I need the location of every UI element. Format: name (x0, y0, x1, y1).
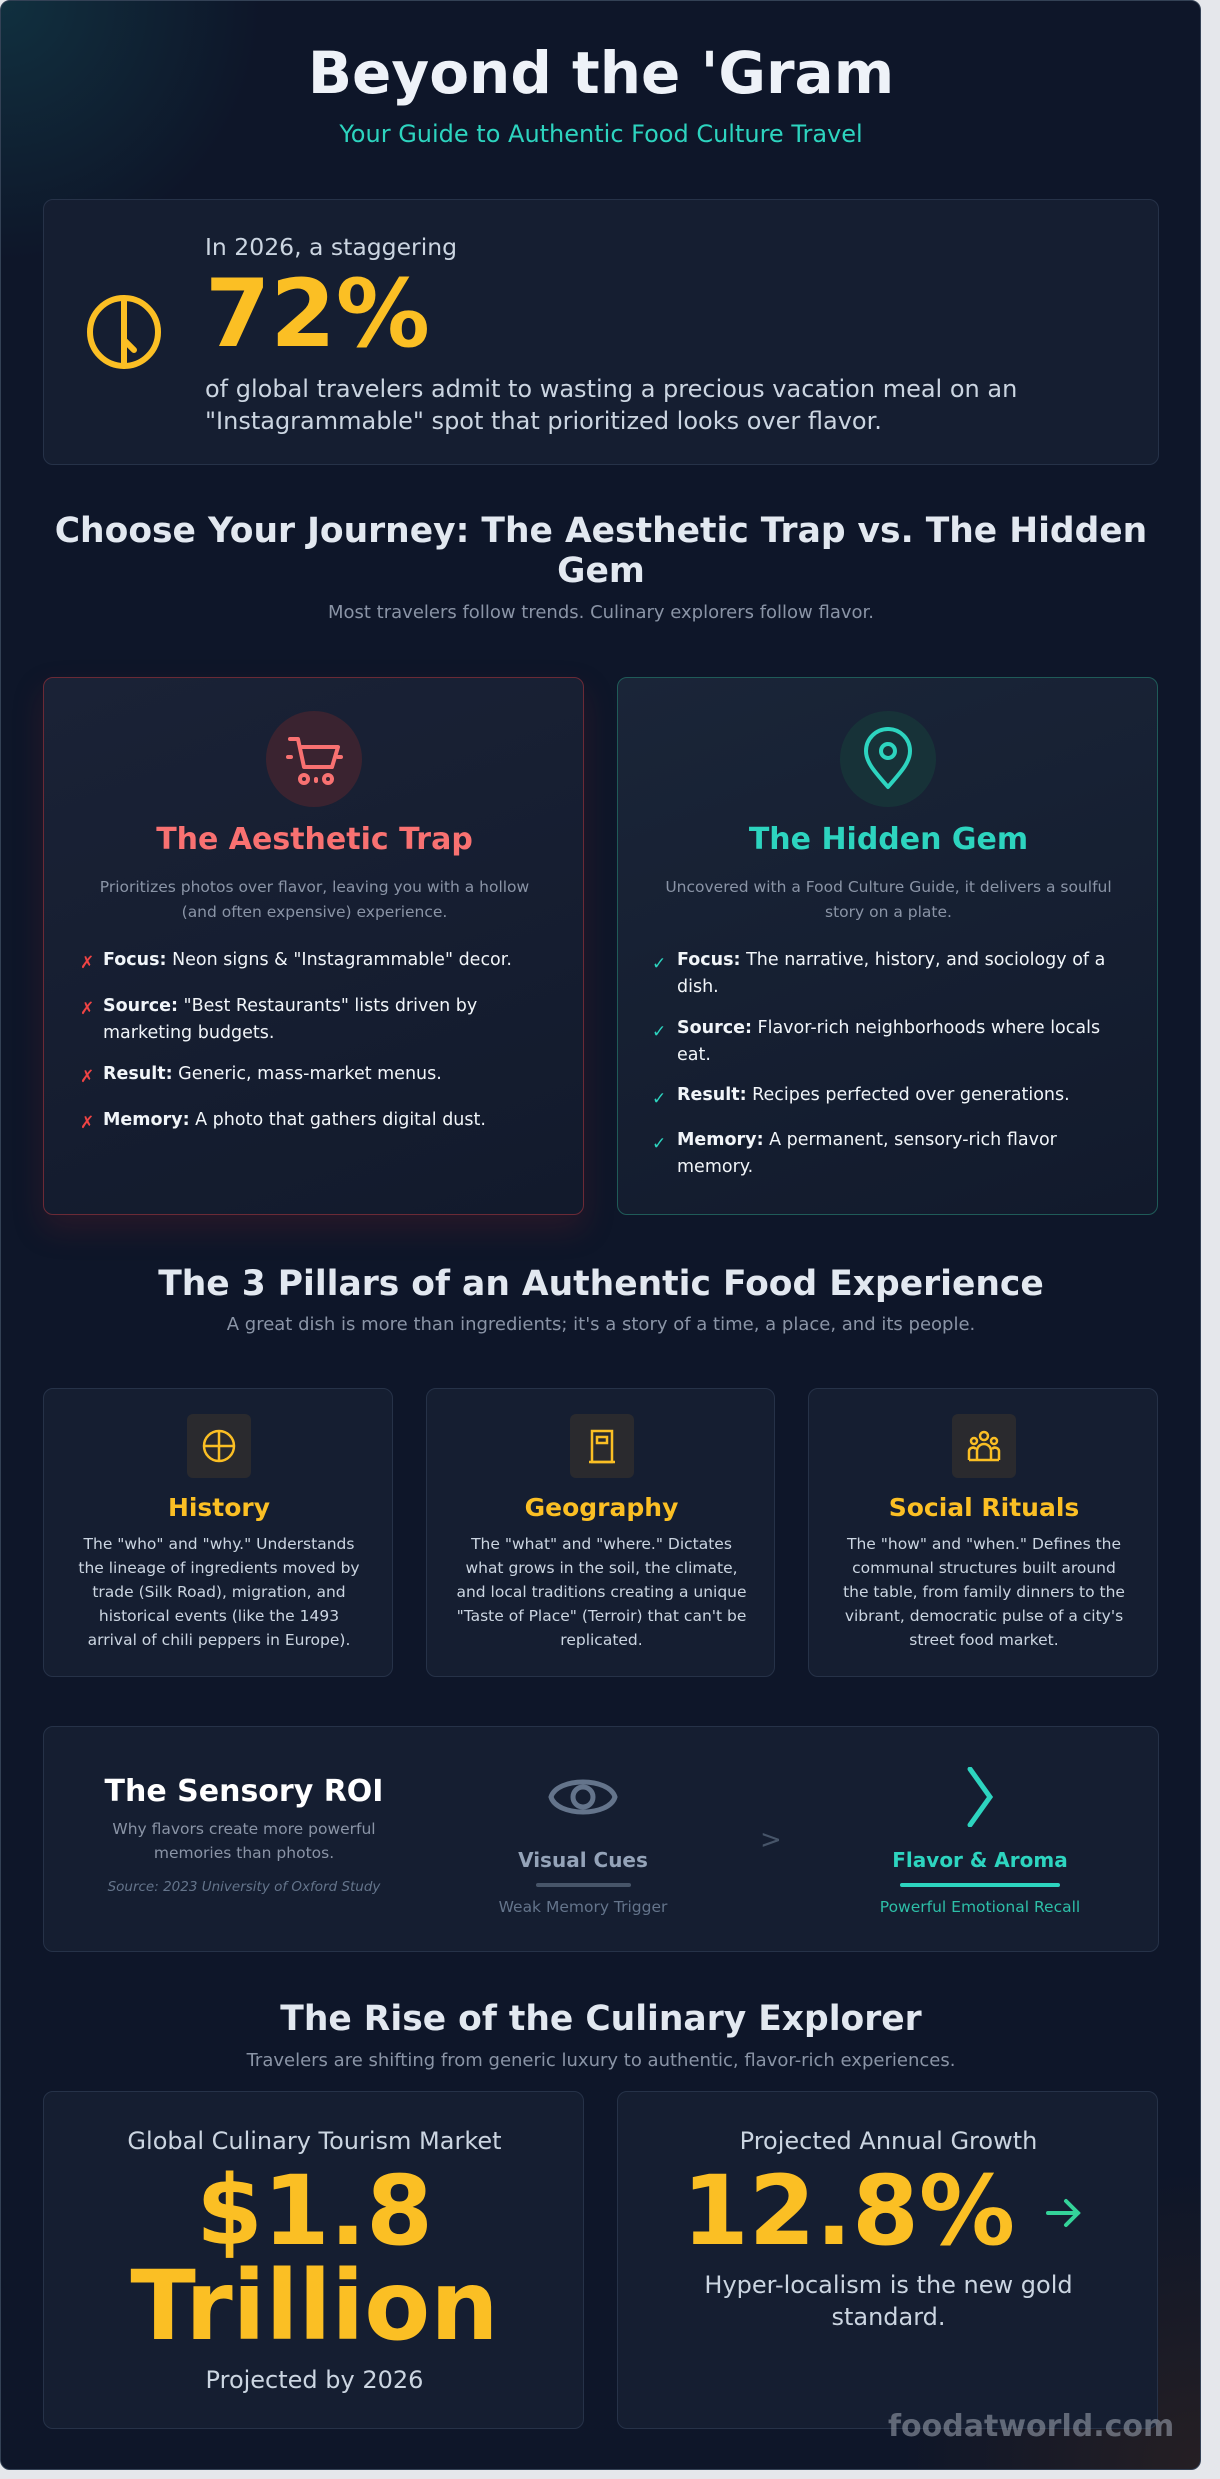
panel: growth (617, 2091, 1158, 2429)
watermark: foodatworld.com (888, 2409, 1174, 2444)
section heading: choose your journey: Choose Your Journey: The Aesthetic Trap vs. The Hidden (55, 511, 1147, 551)
list (652, 950, 1105, 1177)
icon: chevron (968, 1767, 993, 1827)
panel: aesthetic trap: Memory: A photo that gathers digital dust. (103, 1110, 486, 1130)
text: The "who" and "why." Understands the lineage of ingredients moved by trade (Silk Road), migration, and historical events (like the 1493 (78, 1535, 360, 1625)
stat text: In 2026, a staggering (205, 233, 457, 261)
panel: aesthetic trap (43, 677, 584, 1215)
panel: hidden gem: Memory: A permanent, sensory-rich flavor memory. (677, 1130, 1057, 1177)
icon: map pin (840, 711, 936, 807)
text: arrival of chili peppers in Europe). (88, 1631, 350, 1649)
big number: $1.8 (196, 2155, 433, 2267)
stat text (205, 233, 1017, 435)
panel: hidden gem: ✓ (652, 1022, 666, 1042)
big number (130, 2155, 499, 2362)
ROI heading block: memories than photos. (154, 1844, 334, 1862)
description: story on a plate. (825, 903, 952, 921)
section subtitle: A great dish is more than ingredients; it's a story of a time, a place, and its people. (227, 1314, 975, 1335)
panel: market size: Global Culinary Tourism Market (127, 2127, 502, 2155)
stat text: of global travelers admit to wasting a precious vacation meal on an (205, 375, 1017, 403)
description: Uncovered with a Food Culture Guide, it delivers a soulful (665, 878, 1112, 896)
panel: hidden gem: Source: Flavor-rich neighborhoods where locals eat. (677, 1018, 1100, 1065)
panel: market size: Projected by 2026 (206, 2366, 423, 2394)
panel: aesthetic trap: Focus: Neon signs & "Instagrammable" decor. (103, 950, 512, 970)
ROI heading block: Why flavors create more powerful (112, 1820, 376, 1838)
panel: aesthetic trap: Source: "Best Restaurants" lists driven by marketing budgets. (103, 996, 477, 1043)
title: Social Rituals (889, 1493, 1079, 1522)
flavor column: Powerful Emotional Recall (880, 1898, 1080, 1916)
visual cues column: Visual Cues (518, 1848, 648, 1872)
title: Beyond the 'Gram (308, 39, 894, 107)
section heading: choose your journey: Gem (557, 551, 645, 591)
icon: cart (266, 711, 362, 807)
icon: people (952, 1414, 1016, 1478)
title: Geography (525, 1493, 678, 1522)
ROI heading block: Source: 2023 University of Oxford Study (108, 1879, 380, 1895)
description (665, 878, 1112, 921)
panel: hidden gem: Focus: The narrative, history, and sociology of a dish. (677, 950, 1105, 997)
title: The Aesthetic Trap (156, 822, 473, 857)
section heading: choose your journey (55, 511, 1147, 591)
flavor column (880, 1767, 1080, 1916)
panel: hidden gem (617, 677, 1158, 1215)
panel: aesthetic trap: Result: Generic, mass-market menus. (103, 1064, 442, 1084)
visual cues column: Weak Memory Trigger (499, 1898, 667, 1916)
description: (and often expensive) experience. (182, 903, 447, 921)
text (843, 1535, 1125, 1649)
flavor column: Flavor & Aroma (892, 1848, 1068, 1872)
panel: aesthetic trap: ✗ (80, 953, 94, 973)
ROI heading block (104, 1774, 383, 1895)
panel: hidden gem: Result: Recipes perfected over generations. (677, 1085, 1070, 1105)
icon: clock (87, 295, 161, 369)
title: History (168, 1493, 270, 1522)
big number: Trillion (130, 2250, 499, 2362)
section subtitle: Travelers are shifting from generic luxury to authentic, flavor-rich experiences. (247, 2050, 955, 2071)
stat text: 72% (205, 260, 430, 369)
visual cues column (499, 1780, 668, 1916)
panel: growth: Projected Annual Growth (740, 2127, 1037, 2155)
description (100, 878, 529, 921)
panel: aesthetic trap: ✗ (80, 999, 94, 1019)
panel: aesthetic trap: ✗ (80, 1067, 94, 1087)
section heading: pillars: The 3 Pillars of an Authentic Food Experience (158, 1264, 1044, 1304)
panel: hidden gem: ✓ (652, 1134, 666, 1154)
text: The "how" and "when." Defines the communal structures built around (847, 1535, 1121, 1577)
arrow: > (760, 1825, 782, 1855)
big number: 12.8% (682, 2155, 1015, 2267)
list (80, 950, 512, 1133)
ROI heading block: The Sensory ROI (105, 1774, 383, 1809)
panel: social rituals (808, 1388, 1158, 1677)
icon: arrow (1046, 2198, 1081, 2228)
panel: sensory ROI (43, 1726, 1159, 1952)
panel: growth: Hyper-localism is the new gold standard. (704, 2271, 1073, 2331)
panel: hidden gem: ✓ (652, 954, 666, 974)
icon: door (570, 1414, 634, 1478)
stat card (43, 199, 1159, 465)
panel: history (43, 1388, 393, 1677)
title: The Hidden Gem (749, 822, 1028, 857)
panel: geography (426, 1388, 775, 1677)
icon: globe (187, 1414, 251, 1478)
panel: aesthetic trap: ✗ (80, 1113, 94, 1133)
panel: hidden gem: ✓ (652, 1089, 666, 1109)
stat text: "Instagrammable" spot that prioritized looks over flavor. (205, 407, 882, 435)
panel: market size (43, 2091, 584, 2429)
description: Prioritizes photos over flavor, leaving you with a hollow (100, 878, 529, 896)
subtitle: Your Guide to Authentic Food Culture Travel (339, 120, 863, 148)
text: the table, from family dinners to the vibrant, democratic pulse of a city's street food market. (843, 1583, 1125, 1649)
text: The "what" and "where." Dictates what grows in the soil, the climate, and local traditions creating a unique "Taste of Place" (Terroir) that can't be replicated. (456, 1535, 747, 1649)
icon: eye (548, 1780, 618, 1814)
section heading: rise: The Rise of the Culinary Explorer (280, 1999, 922, 2039)
section subtitle: Most travelers follow trends. Culinary explorers follow flavor. (328, 602, 874, 623)
